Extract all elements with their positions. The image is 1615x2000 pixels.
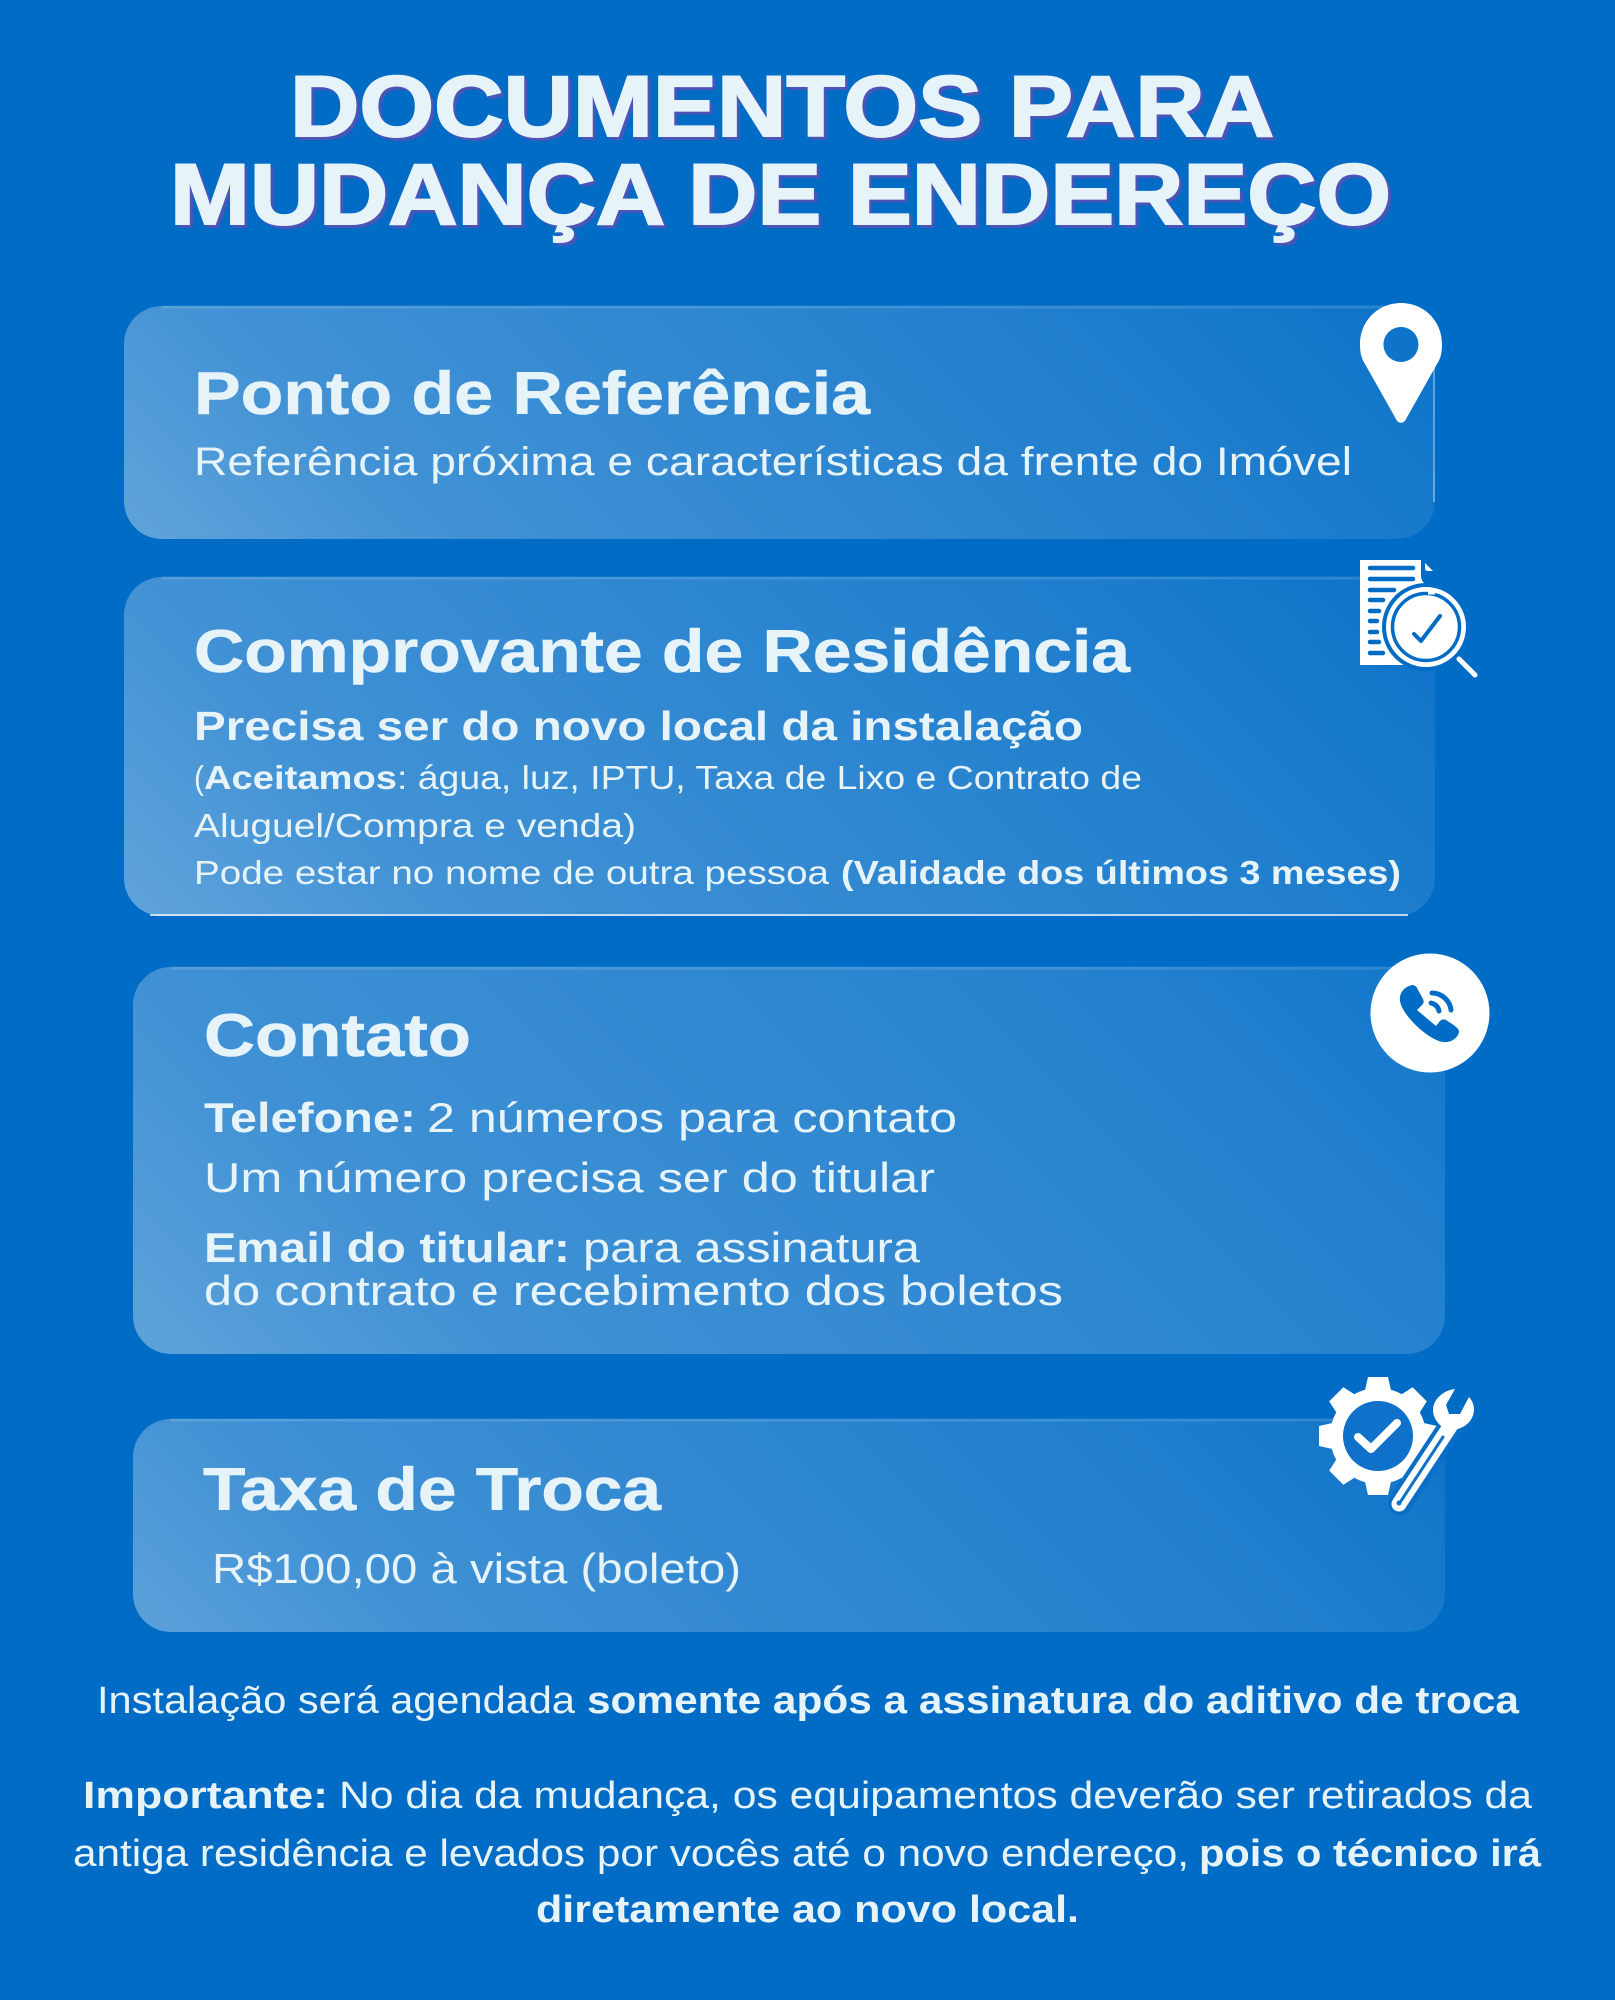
text: agendamento: Instalação será agendada — [97, 1680, 576, 1722]
text: agendamento: somente após a assinatura do aditivo de troca — [587, 1680, 1520, 1722]
panel: comprovante de residência — [124, 577, 1435, 916]
panel: ponto de referência — [124, 306, 1435, 539]
text: documentos aceitos: ( — [194, 759, 204, 796]
text: telefone — [204, 1094, 957, 1201]
text: email: Email do titular: — [204, 1224, 570, 1271]
panel: taxa de troca — [133, 1419, 1445, 1632]
panel: contato — [133, 967, 1445, 1354]
text: agendamento — [97, 1680, 1520, 1722]
heading: taxa de troca: Taxa de Troca — [203, 1456, 662, 1523]
text: telefone: Um número precisa ser do titular — [204, 1154, 935, 1201]
text: importante: pois o técnico irá — [1199, 1833, 1542, 1875]
icon: phone in circle — [1370, 954, 1490, 1072]
text: telefone: 2 números para contato — [427, 1094, 957, 1141]
text: documentos aceitos: (Validade dos últimos 3 meses) — [841, 854, 1401, 891]
heading: comprovante de residência: Comprovante de Residência — [194, 618, 1131, 685]
title: MUDANÇA DE ENDEREÇO — [173, 150, 1394, 246]
text: documentos aceitos — [194, 759, 1401, 891]
text: importante: Importante: — [83, 1775, 328, 1817]
text: email: para assinatura — [583, 1224, 921, 1271]
icon: location pin — [1360, 303, 1442, 423]
text: valor: R$100,00 à vista (boleto) — [212, 1545, 741, 1592]
text: email: do contrato e recebimento dos boletos — [204, 1267, 1063, 1314]
heading: ponto de referência: Ponto de Referência — [194, 360, 871, 427]
icon: gear and wrench — [1319, 1377, 1474, 1506]
text: importante — [73, 1775, 1542, 1931]
subheading: novo local: Precisa ser do novo local da instalação — [194, 703, 1083, 749]
text: documentos aceitos: Pode estar no nome de outra pessoa — [194, 854, 830, 891]
text: importante: antiga residência e levados por vocês até o novo endereço, — [73, 1833, 1189, 1875]
icon: document with magnifier — [1360, 560, 1475, 675]
title: DOCUMENTOS PARA — [290, 59, 1274, 155]
text: documentos aceitos: Aluguel/Compra e venda) — [194, 807, 636, 844]
heading: contato: Contato — [204, 1002, 471, 1069]
text: referência próxima: Referência próxima e características da frente do Imóvel — [194, 440, 1352, 484]
title: DOCUMENTOS PARA — [293, 62, 1277, 158]
title — [170, 59, 1394, 246]
text: importante: No dia da mudança, os equipamentos deverão ser retirados da — [339, 1775, 1533, 1817]
title: MUDANÇA DE ENDEREÇO — [170, 147, 1391, 243]
text: telefone: Telefone: — [204, 1094, 416, 1141]
text: documentos aceitos: : água, luz, IPTU, Taxa de Lixo e Contrato de — [397, 759, 1142, 796]
text: importante: diretamente ao novo local. — [536, 1889, 1079, 1931]
text: email — [204, 1224, 1063, 1314]
text: documentos aceitos: Aceitamos — [204, 759, 397, 796]
